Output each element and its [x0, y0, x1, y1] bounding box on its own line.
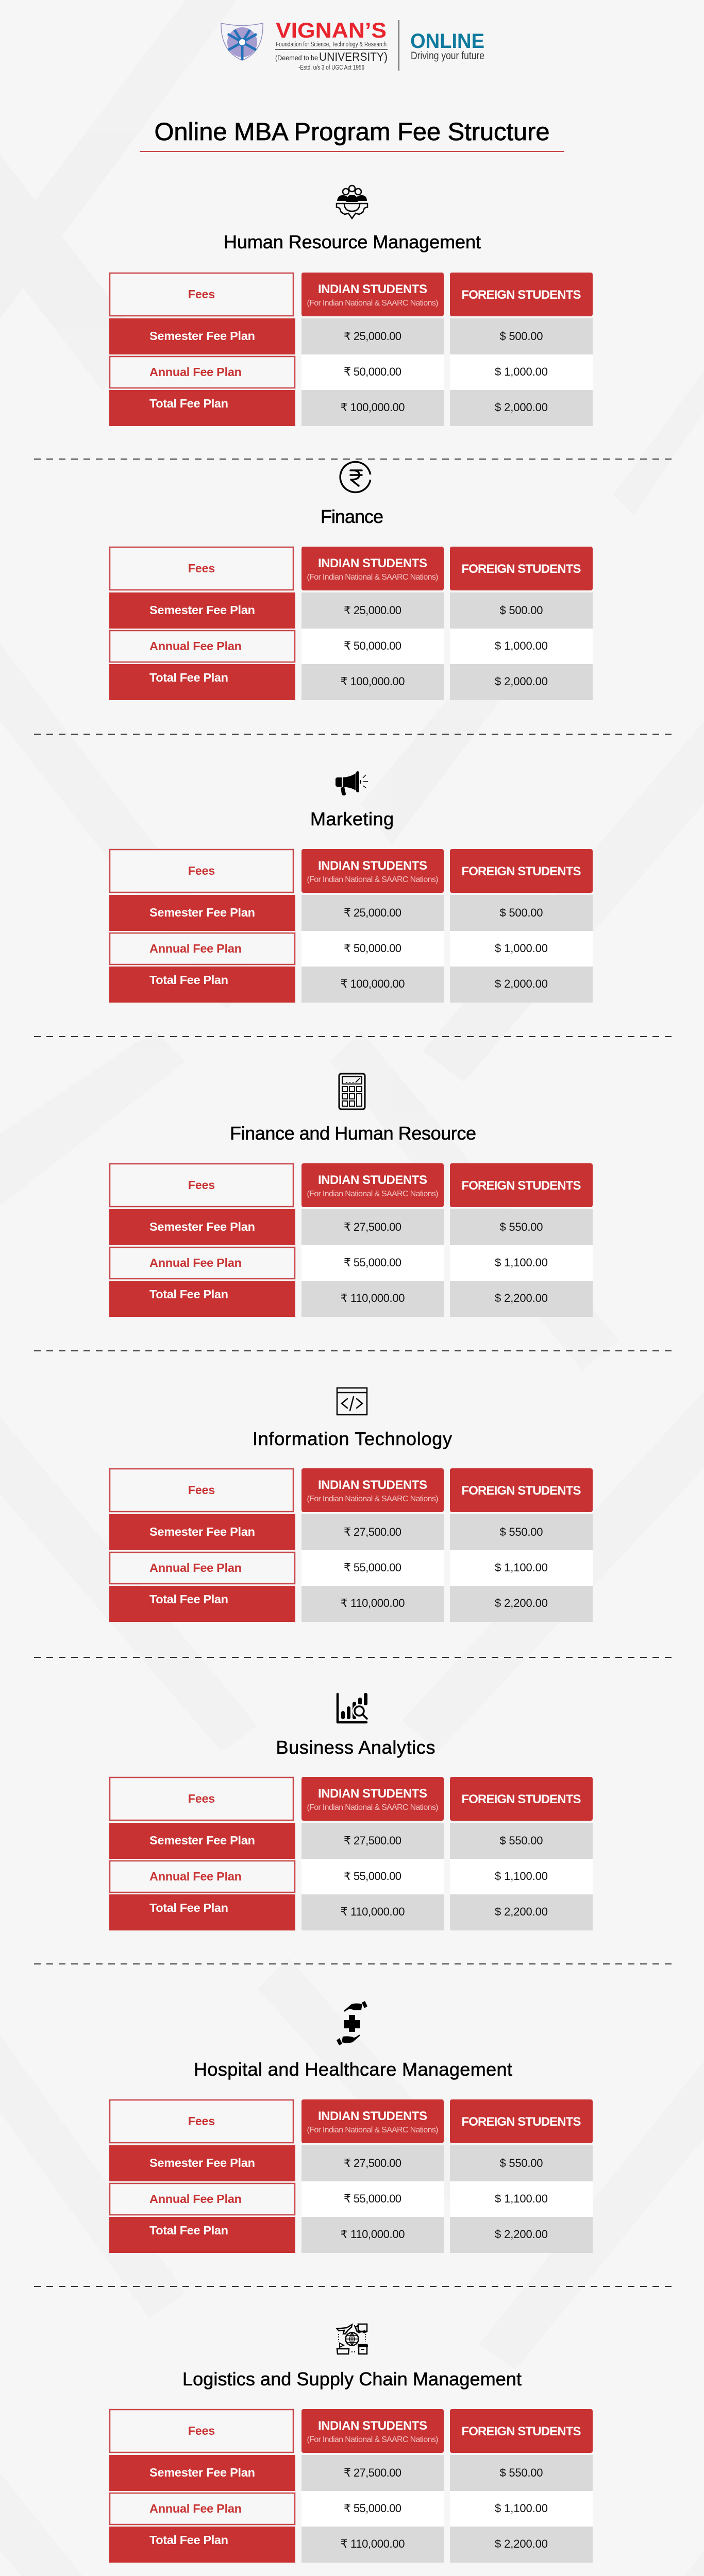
icon: rupee coin	[340, 462, 371, 493]
row: total fee plan	[109, 2217, 593, 2253]
header: indian students	[301, 1468, 444, 1512]
table	[109, 1163, 593, 1317]
header: foreign students	[450, 1163, 593, 1207]
header: indian students: INDIAN STUDENTS	[318, 1787, 427, 1801]
row: semester fee plan: ₹ 25,000.00	[344, 906, 401, 919]
row: semester fee plan	[109, 1209, 593, 1245]
header: indian students: (For Indian National & SAARC Nations)	[307, 2126, 438, 2134]
row: total fee plan: $ 2,200.00	[495, 2228, 548, 2241]
row: annual fee plan: Annual Fee Plan	[149, 639, 242, 653]
header: fees	[110, 1777, 293, 1820]
icon: people and gear	[337, 185, 367, 218]
row: total fee plan	[109, 1586, 593, 1622]
header: indian students	[301, 273, 444, 316]
row: semester fee plan: $ 550.00	[500, 1526, 543, 1538]
header: indian students	[301, 2409, 444, 2453]
header: indian students: INDIAN STUDENTS	[318, 1478, 427, 1492]
header: foreign students: FOREIGN STUDENTS	[462, 2115, 581, 2129]
header: fees	[110, 850, 293, 892]
heading: Business Analytics	[276, 1737, 435, 1758]
header: fees: Fees	[188, 1483, 215, 1497]
row: semester fee plan: $ 550.00	[500, 1834, 543, 1847]
panel: Business Analytics	[109, 1693, 593, 1930]
panel: Marketing	[109, 771, 593, 1003]
header: indian students: INDIAN STUDENTS	[318, 556, 427, 570]
row: semester fee plan: Semester Fee Plan	[149, 603, 255, 617]
row: total fee plan: Total Fee Plan	[149, 1592, 228, 1606]
row: annual fee plan: Annual Fee Plan	[149, 2502, 242, 2515]
row: total fee plan	[109, 967, 593, 1003]
row: total fee plan: $ 2,000.00	[495, 977, 548, 990]
row: semester fee plan	[109, 2145, 593, 2181]
row: total fee plan: ₹ 100,000.00	[340, 401, 405, 414]
header: foreign students: FOREIGN STUDENTS	[462, 562, 581, 576]
row: annual fee plan	[110, 629, 593, 664]
row: semester fee plan: ₹ 27,500.00	[344, 2157, 401, 2170]
row: annual fee plan	[110, 1859, 593, 1894]
logo wordmark: UNIVERSITY)	[319, 50, 388, 63]
row: semester fee plan: Semester Fee Plan	[149, 2156, 255, 2170]
row: semester fee plan: Semester Fee Plan	[149, 329, 255, 343]
header: indian students: (For Indian National & SAARC Nations)	[307, 299, 438, 308]
row: annual fee plan: ₹ 50,000.00	[344, 942, 401, 955]
icon: university shield	[221, 23, 263, 60]
row: semester fee plan: ₹ 27,500.00	[344, 1526, 401, 1538]
row: semester fee plan: $ 500.00	[500, 330, 543, 343]
row: annual fee plan: ₹ 55,000.00	[344, 1256, 401, 1269]
logo wordmark: VIGNAN’S	[276, 18, 387, 42]
row: annual fee plan	[110, 1245, 593, 1281]
logo wordmark	[275, 18, 388, 71]
row: total fee plan: $ 2,000.00	[495, 401, 548, 414]
title: Online MBA Program Fee Structure	[155, 118, 549, 146]
header: indian students: (For Indian National & SAARC Nations)	[307, 573, 438, 582]
row: total fee plan: ₹ 110,000.00	[340, 2537, 405, 2550]
row: semester fee plan: $ 500.00	[500, 906, 543, 919]
header: foreign students: FOREIGN STUDENTS	[462, 865, 581, 878]
header: fees: Fees	[188, 2114, 215, 2128]
table	[109, 849, 593, 1003]
row: semester fee plan: $ 500.00	[500, 604, 543, 617]
header: indian students: INDIAN STUDENTS	[318, 859, 427, 873]
row: total fee plan: $ 2,200.00	[495, 1597, 548, 1609]
header: indian students: INDIAN STUDENTS	[318, 282, 427, 296]
header: foreign students: FOREIGN STUDENTS	[462, 1792, 581, 1806]
row: annual fee plan: $ 1,100.00	[495, 2502, 548, 2515]
row: annual fee plan: Annual Fee Plan	[149, 2192, 242, 2206]
row: annual fee plan	[110, 354, 593, 390]
panel: Logistics and Supply Chain Management	[109, 2324, 593, 2563]
row: semester fee plan: Semester Fee Plan	[149, 1220, 255, 1233]
row: annual fee plan	[110, 1550, 593, 1586]
row: semester fee plan	[109, 1514, 593, 1550]
row: annual fee plan: ₹ 50,000.00	[344, 639, 401, 652]
header: fees	[110, 2410, 293, 2452]
row: semester fee plan: $ 550.00	[500, 2157, 543, 2170]
row: annual fee plan: ₹ 55,000.00	[344, 2192, 401, 2205]
logo online tagline: ONLINE	[410, 30, 484, 53]
row: total fee plan	[109, 1281, 593, 1317]
logo wordmark: Foundation for Science, Technology & Research	[276, 40, 387, 48]
row: annual fee plan: Annual Fee Plan	[149, 1870, 242, 1883]
icon: plane truck globe ship box	[337, 2324, 368, 2354]
row: semester fee plan: ₹ 27,500.00	[344, 1834, 401, 1847]
table	[109, 1468, 593, 1622]
row: total fee plan: Total Fee Plan	[149, 671, 228, 684]
row: annual fee plan: ₹ 55,000.00	[344, 2502, 401, 2515]
header: foreign students	[450, 2099, 593, 2143]
header: indian students	[301, 849, 444, 893]
row: annual fee plan: ₹ 50,000.00	[344, 365, 401, 378]
row: total fee plan: Total Fee Plan	[149, 1287, 228, 1301]
header: fees: Fees	[188, 864, 215, 877]
row: annual fee plan: $ 1,100.00	[495, 1870, 548, 1883]
icon: calculator	[339, 1074, 365, 1109]
logo online tagline: Driving your future	[411, 50, 484, 62]
heading: Hospital and Healthcare Management	[194, 2059, 512, 2080]
heading: Logistics and Supply Chain Management	[182, 2368, 522, 2389]
row: semester fee plan: $ 550.00	[500, 2466, 543, 2479]
heading: Finance	[321, 506, 383, 527]
header: foreign students	[450, 547, 593, 590]
row: semester fee plan	[109, 592, 593, 629]
header: fees: Fees	[188, 2424, 215, 2437]
header: fees	[110, 1469, 293, 1512]
header: fees: Fees	[188, 1792, 215, 1805]
header: foreign students: FOREIGN STUDENTS	[462, 288, 581, 302]
header: logo and title	[140, 18, 564, 152]
row: total fee plan: Total Fee Plan	[149, 2533, 228, 2547]
logo online tagline	[410, 30, 484, 62]
header: fees: Fees	[188, 562, 215, 575]
header: indian students	[301, 1163, 444, 1207]
header: indian students: (For Indian National & SAARC Nations)	[307, 1803, 438, 1812]
row: annual fee plan: $ 1,100.00	[495, 2192, 548, 2205]
row: annual fee plan: $ 1,100.00	[495, 1561, 548, 1574]
header: foreign students	[450, 273, 593, 316]
row: semester fee plan	[109, 2455, 593, 2491]
heading: Information Technology	[253, 1428, 452, 1449]
row: total fee plan: ₹ 110,000.00	[340, 1905, 405, 1918]
panel: Finance and Human Resource	[109, 1073, 593, 1317]
row: semester fee plan: Semester Fee Plan	[149, 2466, 255, 2479]
row: semester fee plan: $ 550.00	[500, 1221, 543, 1233]
row: total fee plan: ₹ 100,000.00	[340, 977, 405, 990]
header: indian students	[301, 547, 444, 590]
row: total fee plan: Total Fee Plan	[149, 1901, 228, 1914]
row: total fee plan: Total Fee Plan	[149, 2224, 228, 2237]
header: foreign students: FOREIGN STUDENTS	[462, 1484, 581, 1498]
row: annual fee plan	[110, 2491, 593, 2527]
header: fees	[110, 273, 293, 316]
row: total fee plan: $ 2,000.00	[495, 675, 548, 688]
row: annual fee plan: Annual Fee Plan	[149, 1256, 242, 1269]
logo	[221, 18, 484, 71]
table	[109, 273, 593, 426]
row: total fee plan: ₹ 110,000.00	[340, 2228, 405, 2241]
panel: Hospital and Healthcare Management	[109, 2001, 593, 2253]
row: semester fee plan: ₹ 25,000.00	[344, 604, 401, 617]
icon: bar chart with magnifier	[338, 1693, 367, 1722]
row: total fee plan: $ 2,200.00	[495, 1292, 548, 1304]
row: semester fee plan: Semester Fee Plan	[149, 1525, 255, 1538]
row: annual fee plan: $ 1,000.00	[495, 365, 548, 378]
header: indian students: INDIAN STUDENTS	[318, 1173, 427, 1187]
icon: hands and medical cross	[337, 2001, 367, 2045]
row: semester fee plan	[109, 1823, 593, 1859]
row: annual fee plan: $ 1,000.00	[495, 639, 548, 652]
row: annual fee plan	[110, 931, 593, 967]
header: fees	[110, 2100, 293, 2143]
row: total fee plan: ₹ 100,000.00	[340, 675, 405, 688]
heading: Finance and Human Resource	[230, 1123, 476, 1144]
header: indian students	[301, 2099, 444, 2143]
row: total fee plan: $ 2,200.00	[495, 2537, 548, 2550]
header: fees	[110, 547, 293, 590]
panel: Information Technology	[109, 1387, 593, 1622]
table	[109, 2099, 593, 2253]
row: annual fee plan: Annual Fee Plan	[149, 365, 242, 379]
panel: Human Resource Management	[109, 184, 593, 426]
logo wordmark: -Estd. u/s 3 of UGC Act 1956	[298, 63, 364, 71]
heading: Human Resource Management	[224, 231, 481, 252]
header: indian students: (For Indian National & SAARC Nations)	[307, 2435, 438, 2444]
row: total fee plan	[109, 664, 593, 700]
header: indian students	[301, 1777, 444, 1821]
table	[109, 1777, 593, 1930]
icon: megaphone	[336, 771, 368, 795]
row: total fee plan: Total Fee Plan	[149, 397, 228, 410]
row: annual fee plan: ₹ 55,000.00	[344, 1870, 401, 1883]
header: foreign students	[450, 1777, 593, 1821]
row: annual fee plan: Annual Fee Plan	[149, 1561, 242, 1574]
logo wordmark: (Deemed to be	[275, 54, 318, 62]
table	[109, 547, 593, 700]
icon: code window	[337, 1388, 367, 1415]
row: annual fee plan: Annual Fee Plan	[149, 942, 242, 955]
header: fees	[110, 1164, 293, 1207]
row: total fee plan	[109, 1894, 593, 1930]
header: foreign students	[450, 2409, 593, 2453]
panel: Finance	[109, 461, 593, 700]
header: fees: Fees	[188, 287, 215, 301]
header: indian students: (For Indian National & SAARC Nations)	[307, 875, 438, 884]
row: annual fee plan	[110, 2181, 593, 2217]
row: annual fee plan: $ 1,000.00	[495, 942, 548, 955]
row: total fee plan: ₹ 110,000.00	[340, 1292, 405, 1304]
row: semester fee plan	[109, 318, 593, 354]
row: semester fee plan: ₹ 27,500.00	[344, 2466, 401, 2479]
row: annual fee plan: ₹ 55,000.00	[344, 1561, 401, 1574]
table	[109, 2409, 593, 2563]
row: semester fee plan	[109, 895, 593, 931]
header: foreign students: FOREIGN STUDENTS	[462, 2425, 581, 2438]
header: foreign students	[450, 1468, 593, 1512]
row: semester fee plan: Semester Fee Plan	[149, 1834, 255, 1847]
header: foreign students: FOREIGN STUDENTS	[462, 1179, 581, 1193]
row: semester fee plan: ₹ 25,000.00	[344, 330, 401, 343]
row: total fee plan: ₹ 110,000.00	[340, 1597, 405, 1609]
header: fees: Fees	[188, 1178, 215, 1192]
header: indian students: (For Indian National & SAARC Nations)	[307, 1190, 438, 1198]
row: total fee plan: Total Fee Plan	[149, 973, 228, 987]
row: total fee plan	[109, 390, 593, 426]
header: indian students: INDIAN STUDENTS	[318, 2419, 427, 2433]
header: foreign students	[450, 849, 593, 893]
heading: Marketing	[310, 808, 394, 829]
row: total fee plan: $ 2,200.00	[495, 1905, 548, 1918]
row: total fee plan	[109, 2527, 593, 2563]
header: indian students: INDIAN STUDENTS	[318, 2109, 427, 2123]
header: indian students: (For Indian National & SAARC Nations)	[307, 1495, 438, 1503]
row: semester fee plan: Semester Fee Plan	[149, 906, 255, 919]
row: semester fee plan: ₹ 27,500.00	[344, 1221, 401, 1233]
row: annual fee plan: $ 1,100.00	[495, 1256, 548, 1269]
